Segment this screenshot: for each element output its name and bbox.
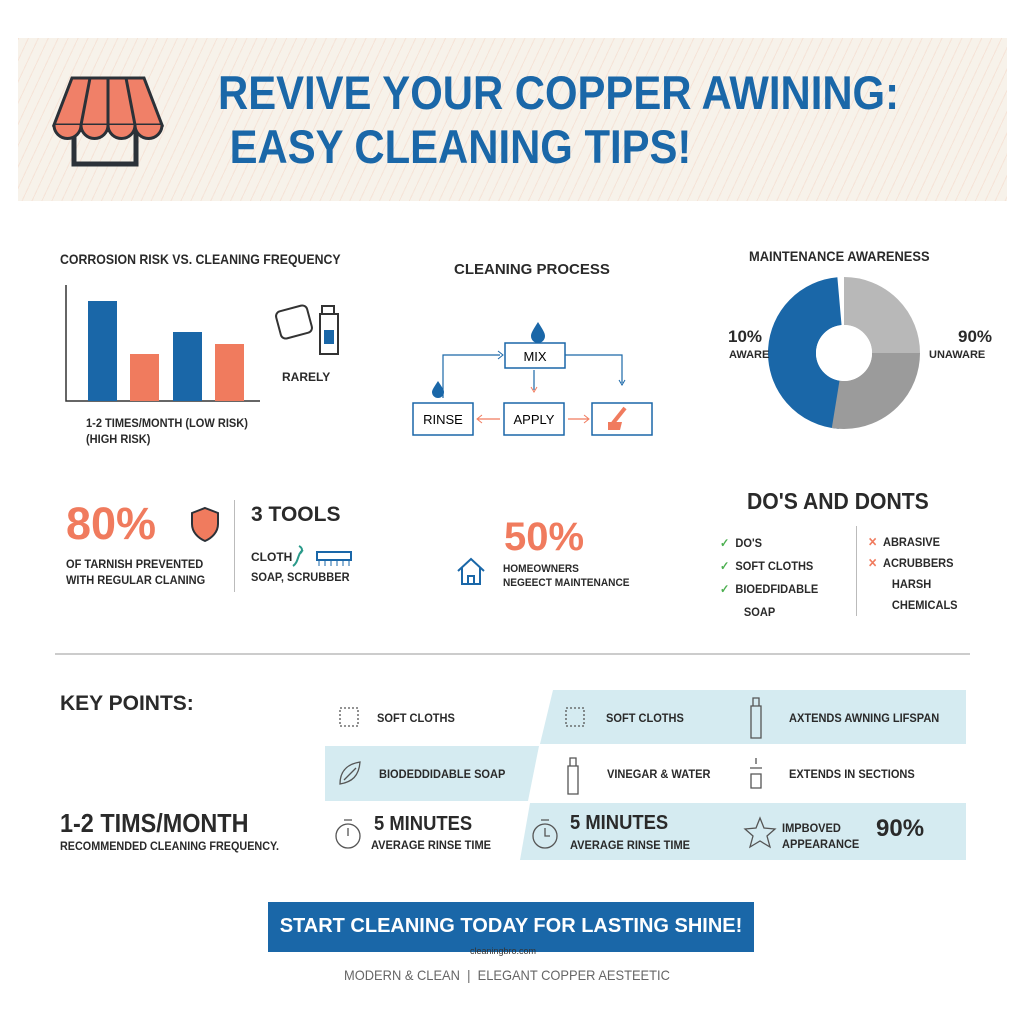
call to action button: START CLEANING TODAY FOR LASTING SHINE! [280,915,742,937]
panel: donut chart: UNAWARE [929,349,985,361]
text: AVERAGE RINSE TIME [570,838,690,852]
panel: cleaning process [412,261,653,436]
list: dos [720,536,818,619]
panel: cleaning process: CLEANING PROCESS [454,261,610,278]
call to action button [268,902,754,952]
text: SOFT CLOTHS [377,711,455,725]
icon: awning shop [52,76,164,166]
stat: 50%: NEGEECT MAINTENANCE [503,577,630,589]
panel: dos and donts: DO'S AND DONTS [747,488,929,514]
text: AVERAGE RINSE TIME [371,838,491,852]
text: SOFT CLOTHS [606,711,684,725]
flowchart: MIX [523,349,547,364]
panel: donut chart: AWARE [729,349,769,361]
stat: 80% [66,498,219,587]
flowchart: RINSE [423,412,463,427]
list: dos: ✓ SOFT CLOTHS [720,559,813,573]
text: 90% [876,815,924,842]
text: BIODEDDIDABLE SOAP [379,767,505,781]
stat: 80%: WITH REGULAR CLANING [66,573,205,587]
text: IMPBOVED [782,821,841,835]
bar chart [65,285,260,402]
panel: bar chart: RARELY [282,370,330,384]
stat: 80%: 80% [66,498,156,549]
list: donts [868,535,958,612]
stat: frequency: 1-2 TIMS/MONTH [60,808,249,838]
icon: cloth and spray [275,304,339,355]
stat: 3 tools: CLOTH [251,550,292,564]
stat: 50% [457,515,630,589]
panel: dos and donts [720,488,958,619]
panel: donut chart [728,248,992,429]
text: APPEARANCE [782,837,859,851]
text: AXTENDS AWNING LIFSPAN [789,711,939,725]
list: donts: CHEMICALS [892,598,958,612]
panel: donut chart: 90% [958,327,992,346]
text: VINEGAR & WATER [607,767,710,781]
text: 5 MINUTES [570,812,668,834]
text: cleaningbro.com [470,946,536,956]
list: donts: ✕ ABRASIVE [868,535,940,549]
flowchart [412,322,653,436]
stat: 80%: OF TARNISH PREVENTED [66,557,203,571]
stat: frequency: RECOMMENDED CLEANING FREQUENCY. [60,839,279,853]
panel: bar chart: 1-2 TIMES/MONTH (LOW RISK) [86,416,248,430]
footer: MODERN & CLEAN | ELEGANT COPPER AESTEETIC [344,967,670,983]
panel: donut chart: 10% [728,327,762,346]
text: EXTENDS IN SECTIONS [789,767,915,781]
panel: bar chart: (HIGH RISK) [86,432,150,446]
panel: donut chart: MAINTENANCE AWARENESS [749,248,930,264]
text: 5 MINUTES [374,813,472,835]
title: REVIVE YOUR COPPER AWINING: [218,66,899,119]
chart title: CORROSION RISK VS. CLEANING FREQUENCY [60,251,341,267]
key points grid [325,690,966,860]
title: EASY CLEANING TIPS! [230,120,691,173]
stat: 50%: HOMEOWNERS [503,563,579,575]
list: dos: ✓ BIOEDFIDABLE [720,582,818,596]
stat: 3 tools [234,500,365,592]
stat: 50%: 50% [504,515,584,559]
flowchart: APPLY [514,412,555,427]
header banner [18,38,1007,201]
panel: bar chart [60,251,341,446]
list: dos: ✓ DO'S [720,536,762,550]
stat: 3 tools: 3 TOOLS [251,503,340,526]
list: dos: SOAP [744,605,775,619]
list: donts: HARSH [892,577,931,591]
title [218,66,899,173]
key points heading: KEY POINTS: [60,692,194,715]
stat: frequency [60,808,279,853]
donut [768,277,920,429]
list: donts: ✕ ACRUBBERS [868,556,954,570]
stat: 3 tools: SOAP, SCRUBBER [251,570,350,584]
